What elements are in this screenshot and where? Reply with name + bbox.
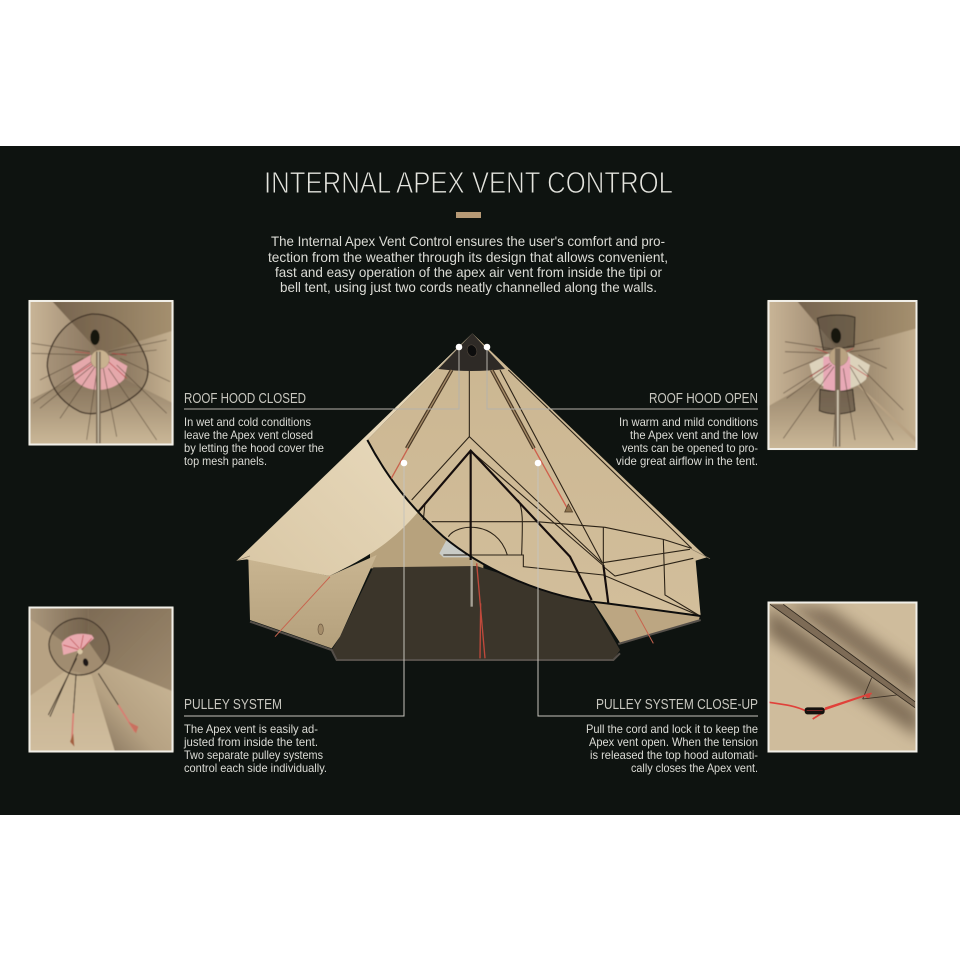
frame: pulley system xyxy=(30,608,172,752)
left rolled flap xyxy=(237,333,472,576)
intro paragraph: tection from the weather through its design that allows convenient, xyxy=(268,249,668,265)
right red cord xyxy=(534,448,567,508)
dark background panel xyxy=(0,146,960,815)
text: pulley system close-up: is released the top hood automati- xyxy=(590,748,758,762)
red floor cords xyxy=(477,563,485,658)
cord tension triangle xyxy=(565,504,573,512)
text: pulley system close-up: Apex vent open. When the tension xyxy=(589,735,758,749)
text: roof hood open: In warm and mild conditions xyxy=(619,415,758,429)
tent interior back wall xyxy=(370,510,483,568)
text: roof hood closed: leave the Apex vent closed xyxy=(184,428,313,442)
left wall red cord xyxy=(275,577,330,637)
accent bar xyxy=(456,212,481,218)
text: roof hood closed: by letting the hood cover the xyxy=(184,441,324,455)
intro paragraph: bell tent, using just two cords neatly channelled along the walls. xyxy=(280,279,657,295)
frame: roof hood closed xyxy=(30,301,172,444)
text: roof hood closed xyxy=(184,415,324,468)
eave tips xyxy=(237,549,710,561)
panel: roof hood open thumbnail xyxy=(768,301,917,449)
intro paragraph: The Internal Apex Vent Control ensures the user's comfort and pro- xyxy=(271,233,665,249)
callout: roof hood closed leader xyxy=(184,344,462,409)
main canopy xyxy=(367,333,707,616)
panel: pulley close-up thumbnail xyxy=(767,602,920,752)
centre pole xyxy=(468,553,475,607)
mesh window xyxy=(439,538,473,557)
heading: roof hood open: ROOF HOOD OPEN xyxy=(649,391,758,407)
heading: pulley system close-up: PULLEY SYSTEM CLOSE-UP xyxy=(596,697,758,713)
apex vent opening xyxy=(466,343,478,358)
intro paragraph xyxy=(268,233,668,295)
right wall hem xyxy=(618,620,701,644)
left strap xyxy=(407,370,452,448)
intro paragraph: fast and easy operation of the apex air vent from inside the tipi or xyxy=(275,264,662,280)
heading: roof hood closed: ROOF HOOD CLOSED xyxy=(184,391,306,407)
text: pulley system: The Apex vent is easily ad- xyxy=(184,722,318,736)
text: pulley system xyxy=(183,722,327,775)
text: pulley system close-up: Pull the cord and lock it to keep the xyxy=(586,722,758,736)
text: pulley system: control each side individually. xyxy=(184,761,327,775)
callout: pulley close-up leader xyxy=(535,460,758,716)
text: roof hood closed: In wet and cold conditions xyxy=(184,415,311,429)
tent floor xyxy=(332,566,620,660)
panel: pulley system thumbnail xyxy=(29,607,173,752)
callout: roof hood open leader xyxy=(484,344,758,409)
frame: pulley close-up xyxy=(768,602,916,752)
left wall hem xyxy=(250,622,620,660)
left wall xyxy=(248,555,377,648)
frame: roof hood open xyxy=(768,301,916,449)
right wall red cord xyxy=(635,610,653,643)
canopy cut edge xyxy=(367,440,701,616)
callout: pulley system leader xyxy=(184,460,407,716)
heading: pulley system: PULLEY SYSTEM xyxy=(184,697,282,713)
text: roof hood open xyxy=(616,415,758,468)
text: pulley system close-up xyxy=(586,722,758,775)
left red cord xyxy=(391,448,408,478)
text: roof hood open: the Apex vent and the low xyxy=(630,428,758,442)
text: roof hood open: vide great airflow in the tent. xyxy=(616,454,758,468)
text: pulley system close-up: cally closes the Apex vent. xyxy=(631,761,758,775)
text: roof hood open: vents can be opened to pro- xyxy=(622,441,758,455)
tent illustration xyxy=(237,333,710,660)
panel: roof hood closed thumbnail xyxy=(29,301,173,445)
right wall xyxy=(593,602,701,643)
text: roof hood closed: top mesh panels. xyxy=(184,454,267,468)
text: pulley system: Two separate pulley systems xyxy=(184,748,323,762)
title: INTERNAL APEX VENT CONTROL xyxy=(264,165,673,200)
text: pulley system: justed from inside the tent. xyxy=(183,735,318,749)
canopy seams xyxy=(412,369,700,616)
door frame xyxy=(418,451,608,603)
apex hood xyxy=(438,333,505,371)
right strap xyxy=(492,370,534,448)
wall badge xyxy=(318,624,323,635)
